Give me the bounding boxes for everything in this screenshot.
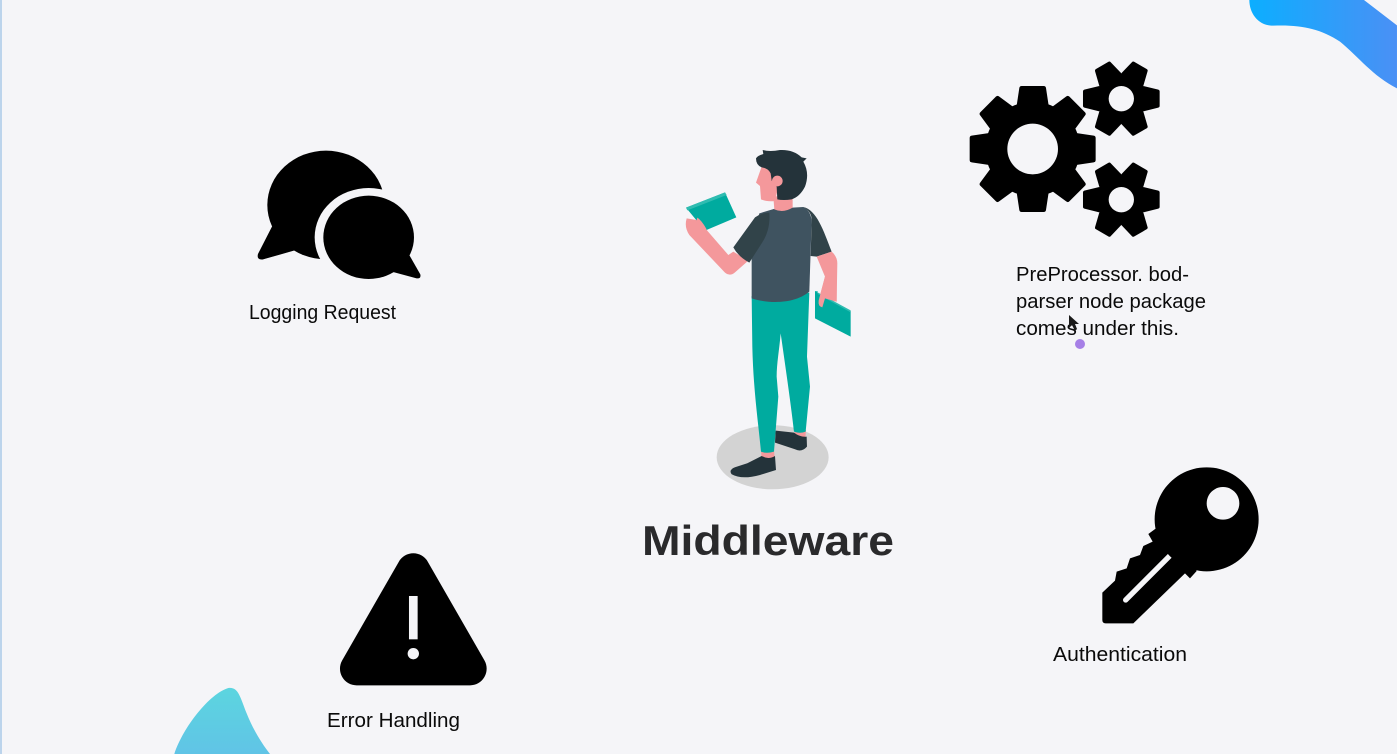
icon: speech bubbles	[258, 151, 423, 287]
text block: PreProcessor: parser node package	[1016, 291, 1206, 313]
cursor highlight dot	[1075, 339, 1085, 349]
small gear top	[1083, 59, 1160, 138]
mouse cursor	[1069, 315, 1079, 331]
decorative blob: bottom left	[174, 688, 270, 754]
icon: key	[1102, 467, 1259, 623]
label: Logging Request: Logging Request	[249, 302, 396, 324]
title: Middleware	[642, 517, 894, 564]
icon: warning triangle	[340, 553, 487, 685]
label: Authentication: Authentication	[1053, 644, 1187, 666]
decorative blob: top right	[1249, 0, 1397, 88]
icon: gears	[970, 59, 1160, 239]
large gear	[970, 86, 1096, 212]
illustration: person holding tablets	[686, 150, 851, 489]
text block: PreProcessor: comes under this.	[1016, 318, 1179, 340]
text block: PreProcessor	[1016, 264, 1206, 340]
label: Error Handling: Error Handling	[327, 710, 460, 732]
text block: PreProcessor: PreProcessor. bod-	[1016, 264, 1189, 286]
small gear bottom	[1083, 160, 1160, 239]
